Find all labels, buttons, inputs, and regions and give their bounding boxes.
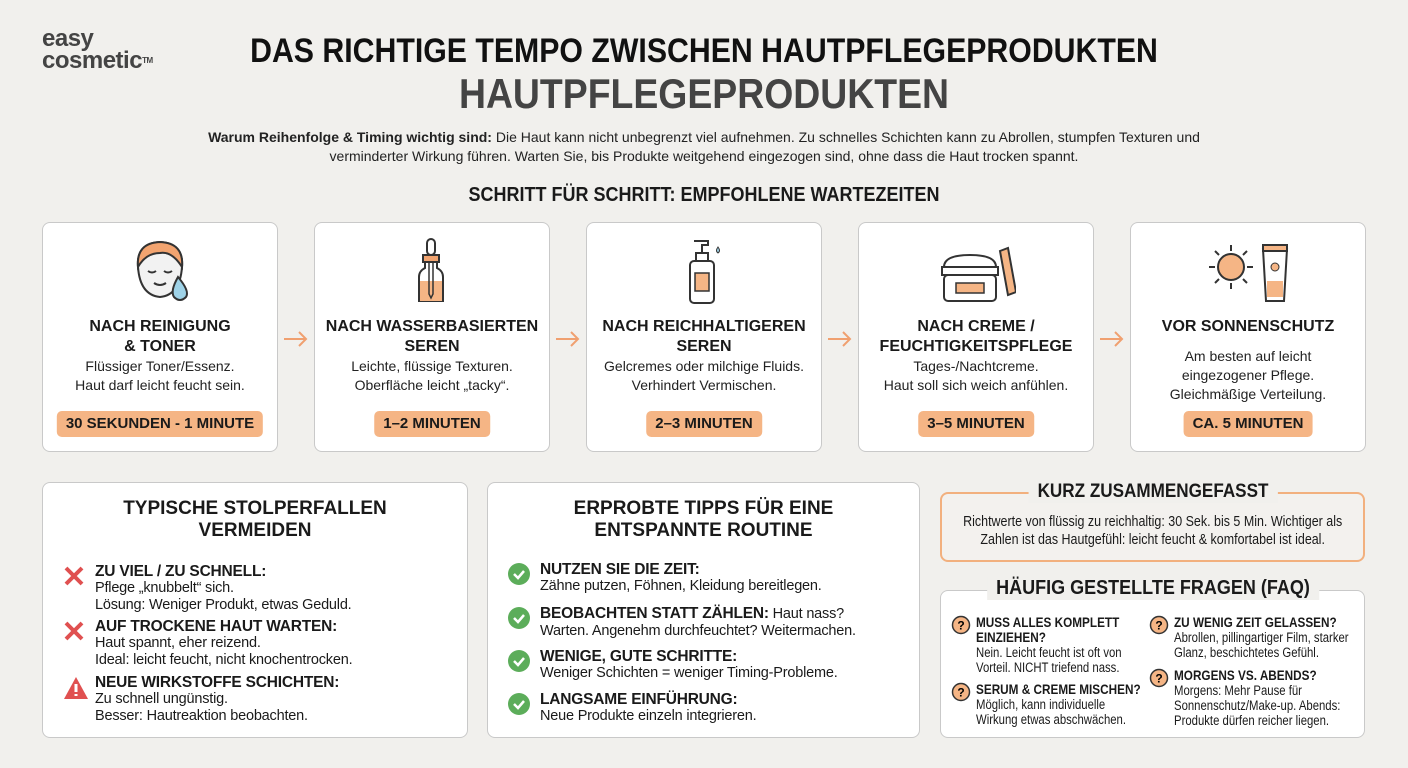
faq 3: ?: [1155, 618, 1163, 632]
faq 1: [952, 614, 1122, 675]
panel: tips: ERPROBTE TIPPS FÜR EINE: [574, 498, 833, 519]
item: dry skin: Ideal: leicht feucht, nicht knochentrocken.: [95, 652, 352, 668]
tip 4: [508, 690, 756, 724]
tip 1: Zähne putzen, Föhnen, Kleidung bereitlegen.: [540, 578, 822, 594]
icon: sun and sunscreen tube: [1209, 244, 1288, 302]
tip 3: WENIGE, GUTE SCHRITTE:: [540, 648, 737, 665]
card 4: NACH CREME /: [917, 318, 1035, 335]
title: HAUTPFLEGEPRODUKTEN: [459, 70, 949, 117]
tip 4: LANGSAME EINFÜHRUNG:: [540, 691, 738, 708]
panel: pitfalls: VERMEIDEN: [199, 520, 311, 541]
card 3: Gelcremes oder milchige Fluids.: [604, 358, 804, 374]
faq 3: Abrollen, pillingartiger Film, starker Glanz, beschichtetes Gefühl.: [1174, 630, 1349, 660]
logo: cosmeticTM: [42, 47, 153, 74]
item: new actives: [64, 674, 339, 724]
tip 2: BEOBACHTEN STATT ZÄHLEN: Haut nass?: [540, 605, 844, 622]
item: new actives: Besser: Hautreaktion beobachten.: [95, 708, 308, 724]
card 3: [586, 222, 822, 452]
card 5: eingezogener Pflege.: [1182, 367, 1314, 383]
section heading: SCHRITT FÜR SCHRITT: EMPFOHLENE WARTEZEITEN: [468, 184, 939, 206]
panel: summary: [940, 492, 1365, 562]
icon: pump bottle: [689, 240, 720, 304]
item: too fast: Pflege „knubbelt“ sich.: [95, 580, 234, 596]
card 1: & TONER: [124, 338, 196, 355]
FAQ heading: HÄUFIG GESTELLTE FRAGEN (FAQ): [996, 577, 1309, 599]
card 4: Tages-/Nachtcreme.: [913, 358, 1039, 374]
card 2: SEREN: [404, 338, 460, 355]
icon: face with drop: [136, 241, 188, 301]
logo: easy: [42, 25, 93, 52]
icon: cream jar: [941, 246, 1016, 302]
item: too fast: ZU VIEL / ZU SCHNELL:: [95, 563, 266, 580]
title: DAS RICHTIGE TEMPO ZWISCHEN HAUTPFLEGEPRODUKTEN: [250, 32, 1158, 70]
summary text: Richtwerte von flüssig zu reichhaltig: 30 Sek. bis 5 Min. Wichtiger als Zahlen ist das Hautgefühl: leicht feucht & komfortabel ist ideal.: [963, 514, 1342, 548]
card 1: [42, 222, 278, 452]
arrow 3: [828, 331, 852, 347]
tip 3: Weniger Schichten = weniger Timing-Probleme.: [540, 665, 838, 681]
panel: pitfalls: [42, 482, 468, 738]
icon: dropper bottle: [418, 238, 444, 302]
faq 2: Möglich, kann individuelle Wirkung etwas abschwächen.: [976, 697, 1126, 727]
tip 2: [508, 604, 856, 639]
item: too fast: Lösung: Weniger Produkt, etwas Geduld.: [95, 597, 352, 613]
summary heading: KURZ ZUSAMMENGEFASST: [1037, 481, 1268, 502]
card 4: 3–5 MINUTEN: [927, 415, 1025, 432]
tip 3: [508, 648, 838, 681]
faq 4: MORGENS VS. ABENDS?: [1174, 667, 1317, 683]
card 1: NACH REINIGUNG: [89, 318, 231, 335]
intro text: Warum Reihenfolge & Timing wichtig sind: Die Haut kann nicht unbegrenzt viel aufnehmen. Zu schnelles Schichten kann zu Abrollen, stumpfen Texturen und verminderter Wirkung führen. Warten Sie, bis Produkte weitgehend eingezogen sind, ohne dass die Haut trocken spannt.: [208, 129, 1200, 164]
card 5: [1130, 222, 1366, 452]
title: [250, 32, 1158, 117]
faq 4: [1150, 667, 1340, 728]
card 3: SEREN: [676, 338, 732, 355]
arrow 4: [1100, 331, 1124, 347]
item: too fast: [64, 563, 352, 613]
card 3: NACH REICHHALTIGEREN: [602, 318, 806, 335]
card 2: Oberfläche leicht „tacky“.: [355, 377, 509, 393]
card 1: Flüssiger Toner/Essenz.: [85, 358, 235, 374]
card 5: Am besten auf leicht: [1185, 348, 1311, 364]
tip 2: Warten. Angenehm durchfeuchtet? Weitermachen.: [540, 623, 856, 639]
logo: [42, 25, 153, 74]
card 4: FEUCHTIGKEITSPFLEGE: [880, 338, 1072, 355]
item: new actives: Zu schnell ungünstig.: [95, 691, 228, 707]
faq 2: [952, 681, 1141, 727]
card 3: 2–3 MINUTEN: [655, 415, 753, 432]
item: dry skin: AUF TROCKENE HAUT WARTEN:: [95, 618, 337, 635]
card 1: Haut darf leicht feucht sein.: [75, 377, 245, 393]
card 5: CA. 5 MINUTEN: [1193, 415, 1303, 432]
faq 2: SERUM & CREME MISCHEN?: [976, 681, 1141, 697]
item: dry skin: Haut spannt, eher reizend.: [95, 635, 261, 651]
panel: FAQ: [940, 590, 1365, 738]
card 2: [314, 222, 550, 452]
faq 3: [1150, 614, 1349, 660]
card 5: Gleichmäßige Verteilung.: [1170, 386, 1326, 402]
card 3: Verhindert Vermischen.: [632, 377, 776, 393]
panel: tips: ENTSPANNTE ROUTINE: [594, 520, 813, 541]
card 2: NACH WASSERBASIERTEN: [326, 318, 538, 335]
arrow 1: [284, 331, 308, 347]
card 1: 30 SEKUNDEN - 1 MINUTE: [66, 415, 254, 432]
faq 4: Morgens: Mehr Pause für Sonnenschutz/Make-up. Abends: Produkte dürfen reicher liegen.: [1174, 683, 1340, 728]
arrow 2: [556, 331, 580, 347]
item: dry skin: [64, 618, 352, 668]
panel: pitfalls: TYPISCHE STOLPERFALLEN: [123, 498, 387, 519]
faq 1: MUSS ALLES KOMPLETT EINZIEHEN?: [976, 614, 1119, 645]
tip 1: [508, 561, 822, 594]
faq 2: ?: [957, 686, 965, 700]
tip 1: NUTZEN SIE DIE ZEIT:: [540, 561, 700, 578]
card 4: Haut soll sich weich anfühlen.: [884, 377, 1068, 393]
faq 4: ?: [1155, 672, 1163, 686]
faq 1: ?: [957, 618, 965, 632]
faq 1: Nein. Leicht feucht ist oft von Vorteil. NICHT triefend nass.: [976, 645, 1122, 675]
card 5: VOR SONNENSCHUTZ: [1162, 318, 1334, 335]
panel: tips: [487, 482, 920, 738]
card 4: [858, 222, 1094, 452]
card 2: 1–2 MINUTEN: [383, 415, 481, 432]
card 2: Leichte, flüssige Texturen.: [351, 358, 513, 374]
item: new actives: NEUE WIRKSTOFFE SCHICHTEN:: [95, 674, 339, 691]
tip 4: Neue Produkte einzeln integrieren.: [540, 708, 756, 724]
faq 3: ZU WENIG ZEIT GELASSEN?: [1174, 614, 1337, 630]
